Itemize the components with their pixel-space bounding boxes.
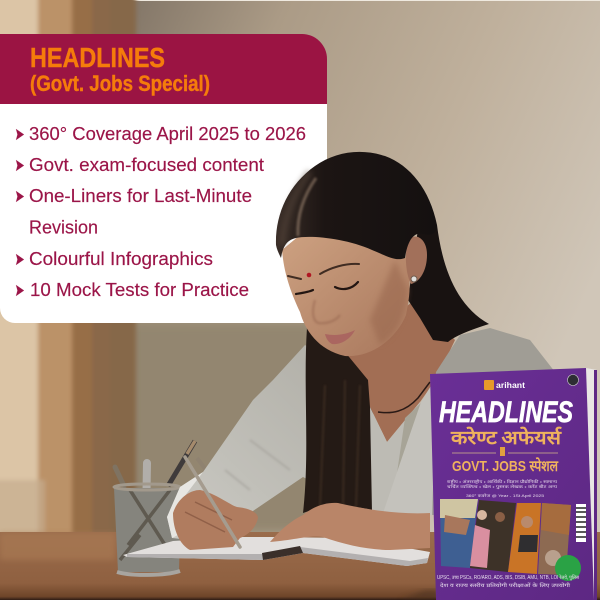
lips	[325, 330, 355, 344]
heading: (Govt. Jobs Special)	[30, 71, 210, 96]
sleeve and kurta body	[167, 345, 372, 540]
book topics: 360° कवरेज @ Year - 1St April 2025	[466, 493, 545, 498]
desk	[0, 532, 600, 600]
face	[282, 235, 410, 356]
book subtitle hindi: करेण्ट अफेयर्स	[450, 423, 562, 450]
eyebrows	[288, 264, 359, 279]
book topics: चर्चित व्यक्तित्व • खेल • पुस्तक लेखक • करेंट बीट अन्य	[447, 484, 558, 490]
bullet 4: Colourful Infographics	[29, 248, 213, 269]
cover photos	[440, 499, 571, 575]
long hair	[303, 327, 373, 513]
curtain	[0, 0, 136, 540]
photo: film stars	[470, 500, 516, 572]
mesh cup	[114, 488, 181, 572]
hair parting highlight	[298, 178, 316, 236]
book topics: राष्ट्रीय • अंतरराष्ट्रीय • आर्थिकी • विज्ञान प्रौद्योगिकी • सामान्य	[447, 479, 558, 484]
bullet 2: Govt. exam-focused content	[29, 154, 264, 175]
writing hand	[173, 490, 258, 550]
book shadow	[400, 590, 438, 600]
heading	[30, 42, 210, 96]
bindi	[307, 273, 311, 277]
woman writing	[123, 152, 555, 566]
exam list	[437, 574, 580, 589]
pens	[115, 467, 124, 486]
photo: leader	[508, 503, 541, 574]
earring	[411, 276, 417, 282]
notebook	[123, 537, 430, 566]
book pages and back cover	[586, 368, 597, 600]
eyes	[296, 282, 358, 294]
front cover	[430, 368, 594, 600]
pen holder	[114, 441, 206, 575]
dupatta on shoulder	[420, 328, 555, 515]
hair top	[276, 152, 437, 259]
ear	[406, 236, 427, 284]
edition badge	[568, 374, 578, 386]
green badge	[555, 555, 581, 581]
resting hand	[270, 503, 430, 550]
bullet 5: 10 Mock Tests for Practice	[30, 279, 249, 300]
info panel	[0, 34, 327, 323]
bullet 3: Revision	[29, 216, 98, 238]
bullet 3: One-Liners for Last-Minute	[29, 185, 252, 206]
book topics	[447, 479, 558, 498]
feature list	[16, 123, 306, 300]
emblem divider	[452, 447, 558, 456]
neck	[345, 300, 455, 442]
book cover	[400, 368, 597, 600]
writing pen	[185, 457, 240, 547]
book subtitle govt jobs: GOVT. JOBS स्पेशल	[452, 457, 559, 475]
photo: news collage	[538, 503, 571, 575]
exam list: देश व राज्य स्तरीय प्रतियोगी परीक्षाओं के लिए उपयोगी	[439, 582, 571, 589]
heading: HEADLINES	[30, 42, 165, 73]
bullet 1: 360° Coverage April 2025 to 2026	[29, 123, 306, 144]
exam list: UPSC, उच्च PSCs, RO/ARO, ADS, BIS, DSIB, AMU, NTB, LOI रेलवे, पुलिस	[437, 574, 580, 581]
panel header band	[0, 34, 327, 104]
nose shadow	[313, 300, 340, 323]
hair behind ear	[408, 215, 489, 342]
panel body	[0, 104, 327, 323]
publisher logo	[484, 380, 525, 390]
bullet 3	[16, 185, 252, 238]
photo: cricket team	[440, 499, 478, 568]
publisher logo: arihant	[496, 381, 525, 390]
kurta front	[370, 402, 425, 512]
barcode	[576, 504, 586, 542]
necklace	[378, 382, 430, 413]
